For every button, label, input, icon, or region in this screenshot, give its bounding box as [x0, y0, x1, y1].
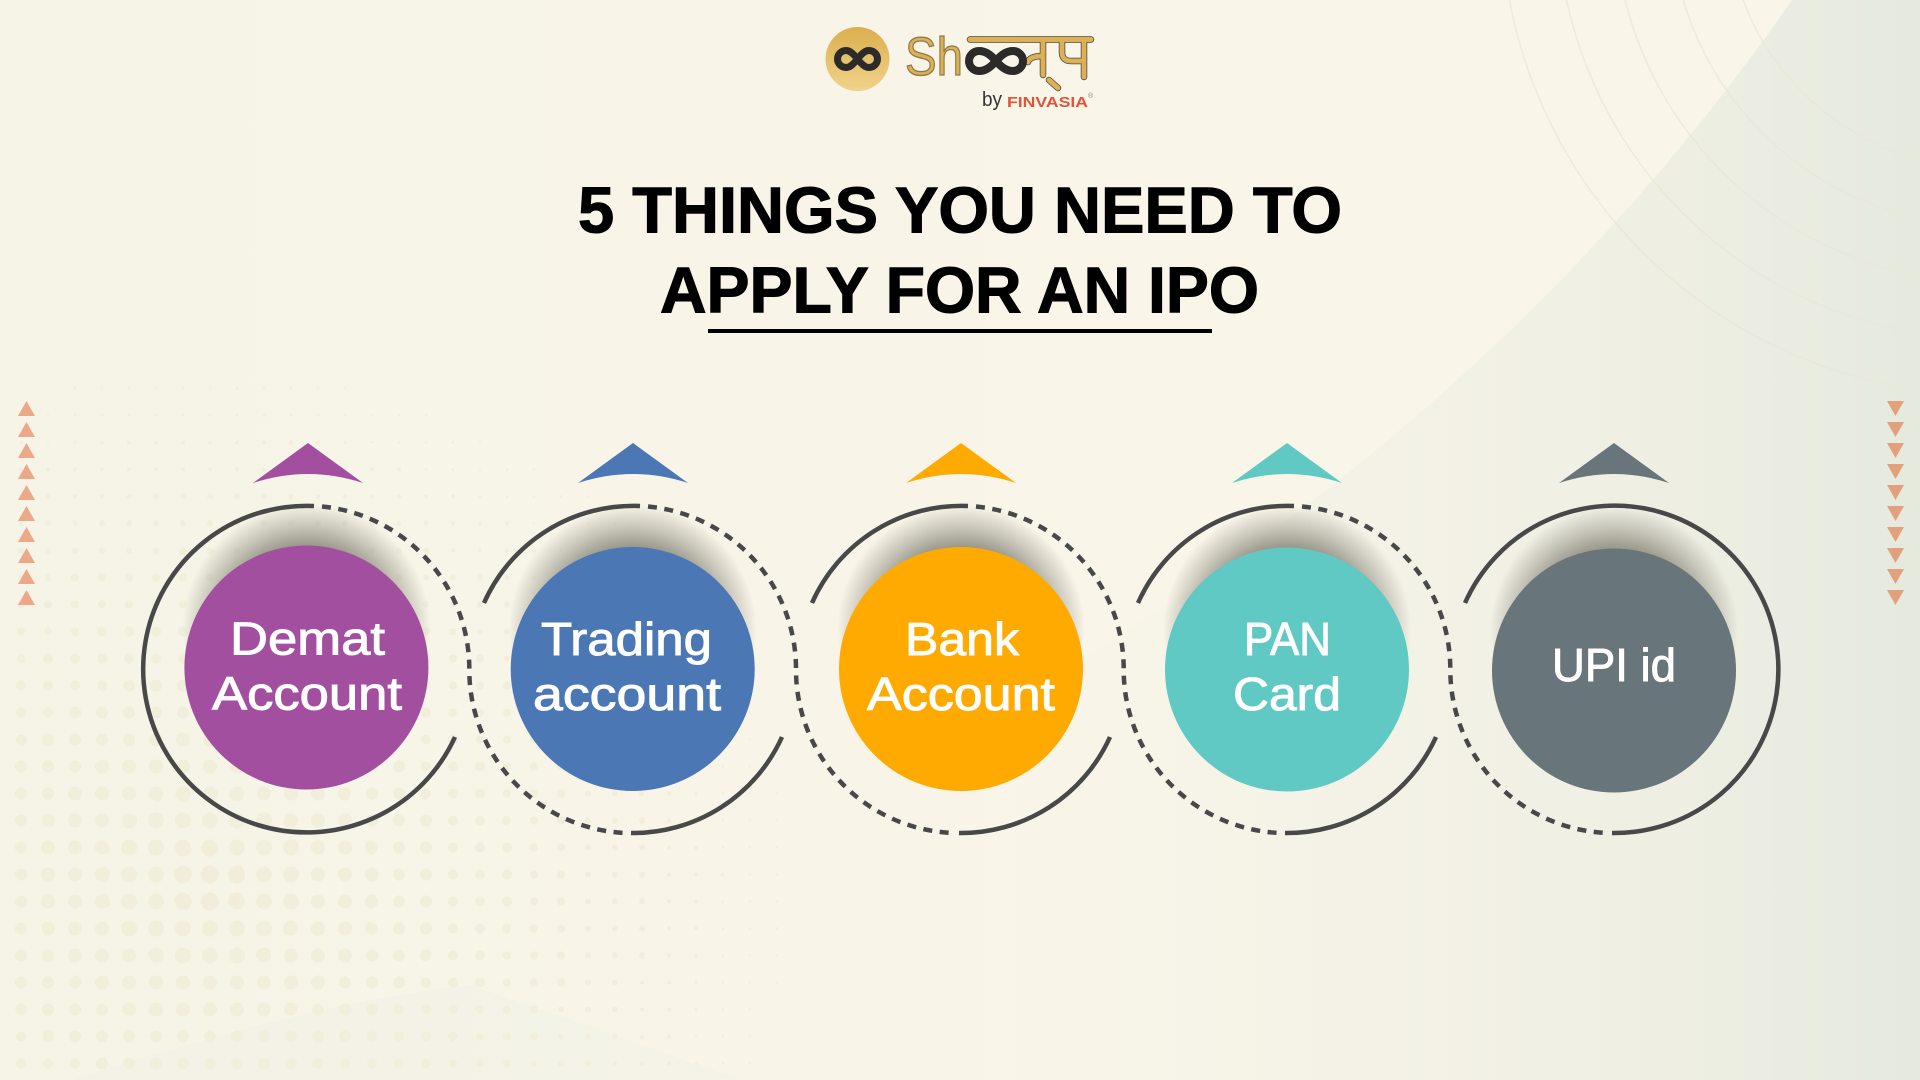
title: [578, 174, 1342, 333]
label: Bank: [905, 613, 1020, 665]
connected solid and dashed rings: [143, 506, 1778, 833]
shadow: [182, 504, 430, 752]
label: Demat: [230, 612, 385, 664]
circle: [839, 547, 1083, 791]
label: PAN: [1244, 613, 1331, 665]
logo byline: by: [982, 89, 1002, 111]
label: [1233, 613, 1341, 720]
shadow: [1163, 506, 1411, 754]
logo brand name: FINVASIA: [1007, 94, 1088, 111]
logo badge: [826, 27, 890, 91]
logo wordmark: Sh: [905, 27, 963, 87]
label: [867, 613, 1055, 720]
label: UPI id: [1552, 639, 1676, 691]
shadow: [509, 505, 757, 753]
circle: [1492, 548, 1736, 792]
left arrow column: [18, 401, 35, 605]
circle: [1165, 548, 1409, 792]
label: [533, 613, 721, 720]
pointer triangle: [906, 443, 1016, 483]
item 2: Trading account: [509, 443, 757, 791]
item 3: Bank Account: [837, 443, 1085, 791]
logo: Shoonya by Finvasia: [826, 27, 1094, 111]
title: 5 THINGS YOU NEED TO: [578, 174, 1342, 246]
title: APPLY FOR AN IPO: [660, 254, 1259, 326]
label: Card: [1233, 668, 1341, 720]
label: Account: [212, 668, 402, 720]
circle: [184, 546, 428, 790]
circle: [511, 547, 755, 791]
pointer triangle: [253, 443, 363, 483]
logo ornament: [969, 40, 1091, 88]
pointer triangle: [1232, 443, 1342, 483]
right arrow column: [1887, 401, 1904, 605]
pointer triangle: [1559, 443, 1669, 483]
decorative concentric arcs top right: [1501, 0, 1920, 394]
item 5: UPI id: [1490, 443, 1738, 792]
label: Trading: [541, 613, 712, 665]
pointer triangle: [578, 443, 688, 483]
item 4: PAN Card: [1163, 443, 1411, 792]
label: [212, 612, 402, 720]
registered mark: ®: [1088, 92, 1094, 100]
label: Account: [867, 668, 1055, 720]
shadow: [1490, 506, 1738, 754]
item 1: Demat Account: [182, 443, 430, 790]
shadow: [837, 505, 1085, 753]
label: account: [533, 668, 721, 720]
halftone dot field bottom left: [8, 375, 790, 1077]
